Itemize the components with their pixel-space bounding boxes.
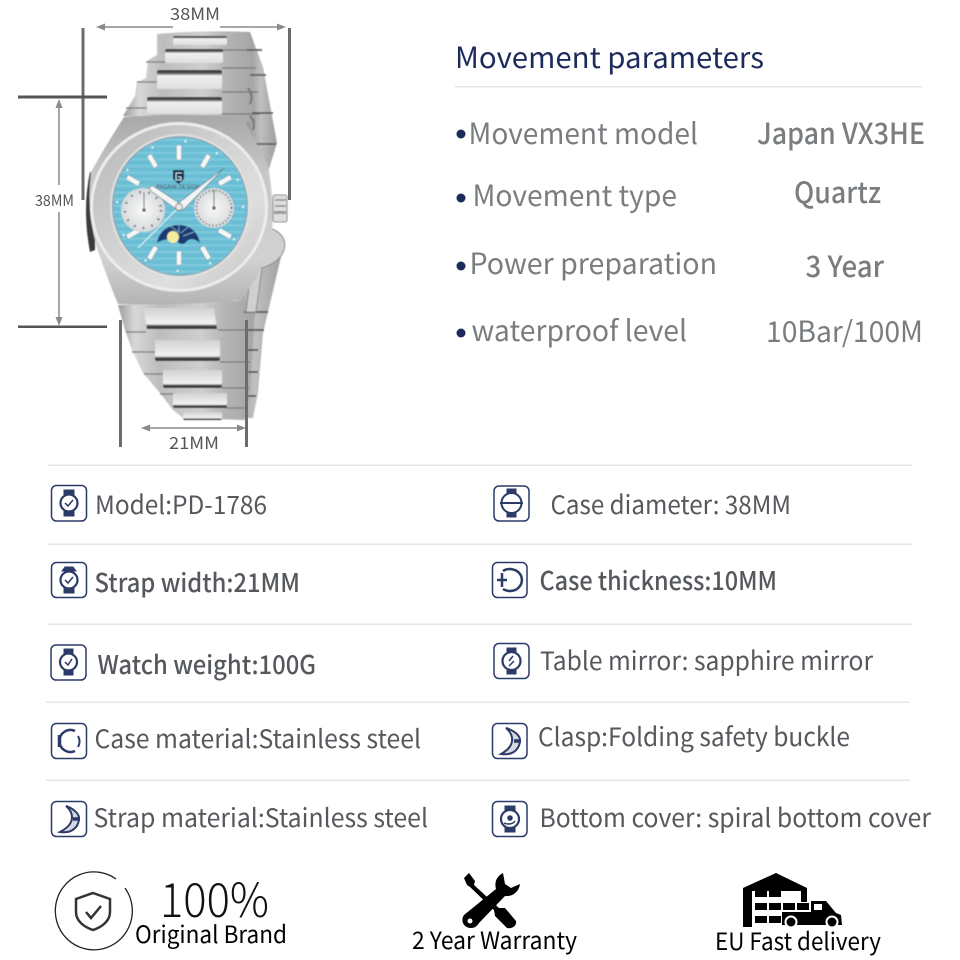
panel: specification list (51, 485, 931, 836)
hour markers (126, 145, 232, 265)
badge: warranty (412, 873, 577, 956)
row: movement type (456, 170, 881, 215)
dimension: side 38MM (18, 96, 107, 328)
badge: delivery: EU Fast delivery (715, 922, 881, 957)
badge: original brand: Original Brand (135, 915, 287, 950)
dial (110, 134, 250, 278)
badge: delivery (715, 873, 881, 957)
icon: watch with lugs (52, 562, 86, 598)
icon: bottom cover (492, 802, 527, 836)
spec: table mirror: Table mirror: sapphire mirror (540, 641, 873, 678)
icon: case ring (52, 724, 86, 758)
row: power preparation: Power preparation (470, 241, 717, 283)
watch photo (86, 31, 287, 420)
moon phase (157, 225, 200, 244)
bottom strap (118, 228, 285, 420)
icon: thickness (492, 562, 527, 598)
icon: watch (52, 486, 86, 521)
badge: original brand (55, 862, 287, 950)
row: movement type: Quartz (794, 170, 881, 212)
row: movement model: Japan VX3HE (757, 111, 925, 153)
brand logo (156, 170, 200, 191)
icon: strap (52, 802, 86, 836)
panel: movement parameters table (456, 111, 925, 351)
dimension: 21MM (119, 320, 248, 454)
spec: model: Model:PD-1786 (95, 485, 267, 522)
top strap (123, 31, 277, 172)
row: waterproof level (456, 308, 923, 351)
heading: movement parameters: Movement parameters (455, 35, 764, 77)
watch hands (138, 168, 224, 248)
dimension: top 38MM: 38MM (170, 0, 220, 25)
bezel (90, 122, 268, 292)
icon: warehouse and truck (743, 873, 842, 928)
icon: mirror (494, 644, 529, 678)
icon: shield in circle (55, 872, 132, 950)
spec: case diameter: Case diameter: 38MM (550, 485, 791, 522)
right subdial (194, 188, 234, 228)
crown and pusher (86, 172, 287, 252)
row: movement model (456, 111, 925, 153)
icon: crossed tools (462, 873, 520, 928)
brand logo: PAGANI DESIGN (156, 182, 200, 191)
icon: clasp (492, 724, 527, 758)
dimension: side 38MM: 38MM (35, 189, 74, 211)
left subdial (121, 188, 165, 232)
dimension: 21MM: 21MM (169, 429, 219, 454)
spec: watch weight: Watch weight:100G (98, 645, 316, 682)
spec: clasp: Clasp:Folding safety buckle (538, 717, 850, 754)
row: movement type: Movement type (472, 173, 677, 215)
case (89, 115, 273, 304)
row: power preparation: 3 Year (806, 244, 884, 286)
icon: diameter (494, 486, 529, 521)
row: movement model: Movement model (468, 111, 698, 153)
row: waterproof level: 10Bar/100M (766, 309, 923, 351)
spec: strap material: Strap material:Stainless steel (94, 798, 428, 835)
spec: bottom cover: Bottom cover: spiral bottom cover (540, 798, 931, 835)
badge: original brand: 100% (160, 862, 269, 931)
spec: case thickness: Case thickness:10MM (540, 561, 777, 598)
spec: case material: Case material:Stainless steel (94, 719, 421, 756)
icon: watch (51, 645, 86, 680)
row: power preparation (456, 241, 884, 286)
spec: strap width: Strap width:21MM (94, 563, 300, 600)
row: waterproof level: waterproof level (472, 308, 687, 350)
dimension: top 38MM (82, 0, 291, 200)
badge: warranty: 2 Year Warranty (412, 921, 577, 956)
